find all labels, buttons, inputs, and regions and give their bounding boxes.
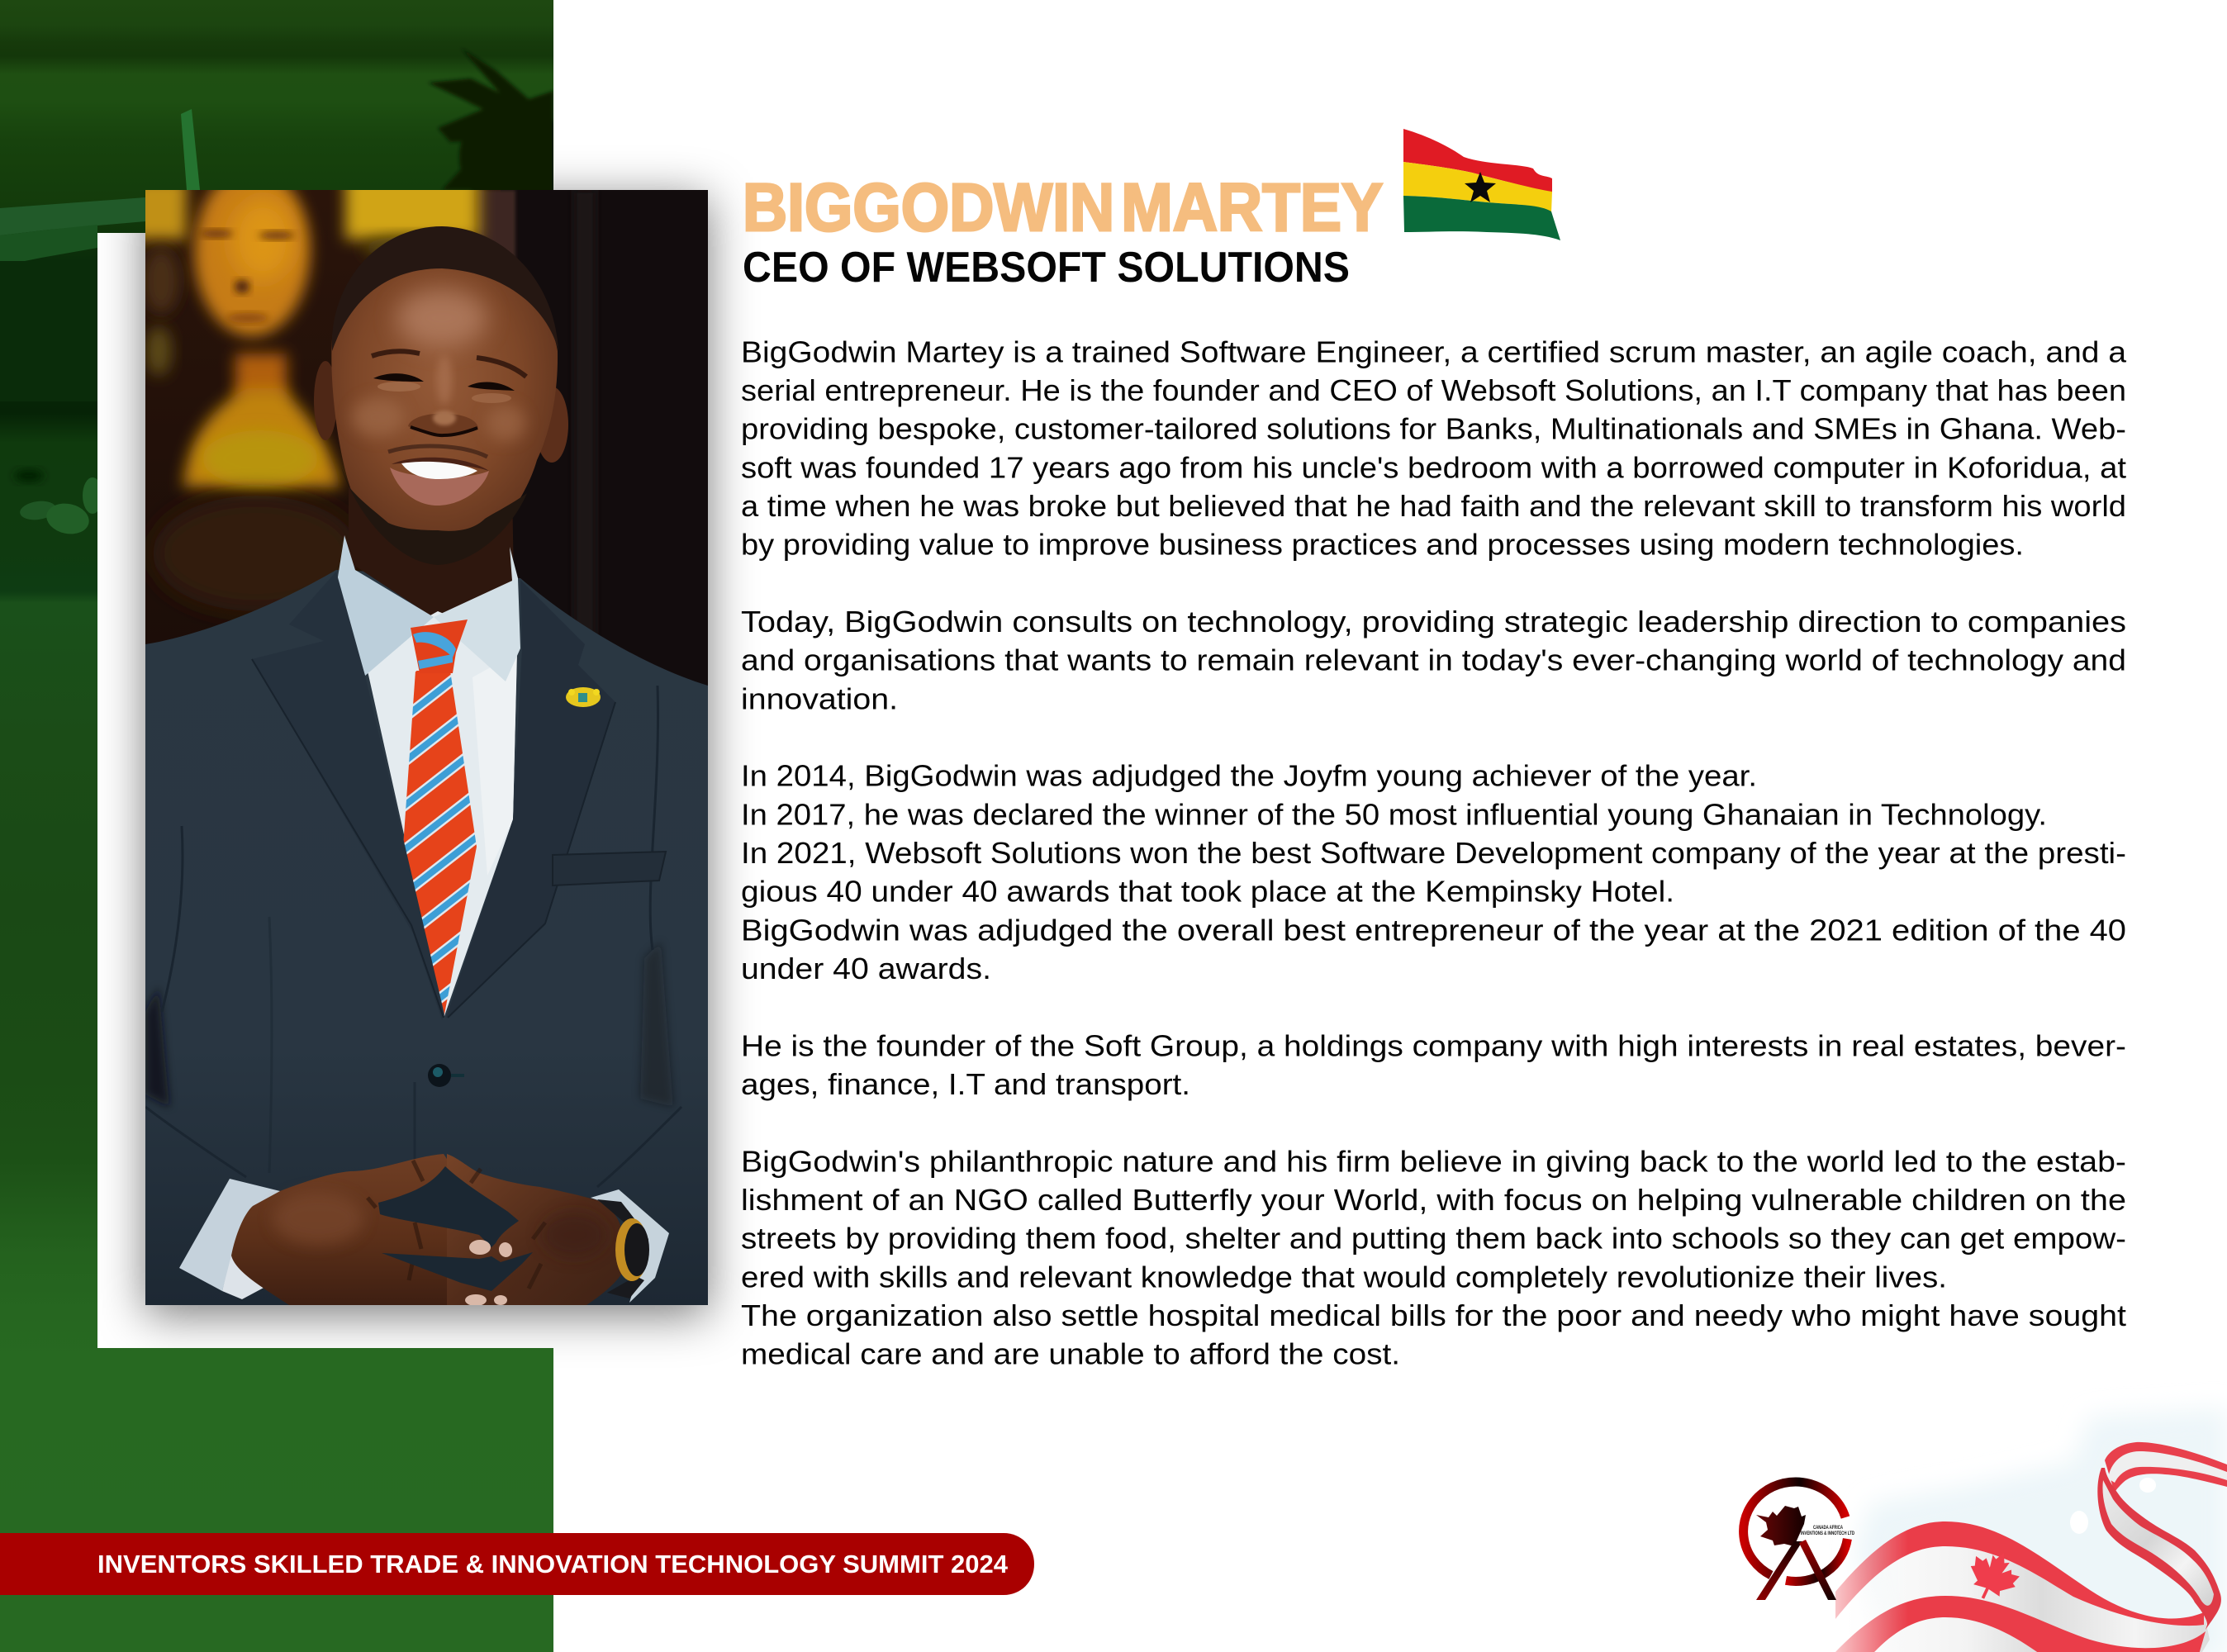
ribbon S fold	[2097, 1468, 2221, 1630]
biography paragraph 5: medical care and are unable to afford the cost.	[741, 1337, 1400, 1371]
gaps between fingers	[378, 1166, 533, 1291]
suit jacket	[145, 570, 708, 1305]
biography paragraph 4: ages, finance, I.T and transport.	[741, 1067, 1190, 1101]
biography paragraph 3: awards: In 2014, BigGodwin was adjudged the Joyfm young achiever of the year.	[741, 759, 1757, 793]
biography paragraph 4	[741, 1028, 2126, 1101]
photo shadow	[145, 198, 708, 1315]
portrait photo	[132, 168, 708, 1306]
forehead highlight	[396, 289, 487, 347]
biography paragraph 3: awards: BigGodwin was adjudged the overall best entrepreneur of the year at the 2021 edition of the 40	[741, 913, 2126, 947]
biography paragraph 5: The organization also settle hospital medical bills for the poor and needy who might have sought	[741, 1298, 2126, 1332]
eyes	[373, 373, 424, 382]
biography paragraph 5	[741, 1144, 2126, 1371]
table edge in green room	[0, 197, 145, 401]
eyebrows	[372, 351, 420, 356]
banner: summit name: INVENTORS SKILLED TRADE & INNOVATION TECHNOLOGY SUMMIT 2024	[97, 1550, 1009, 1578]
logo maple leaf	[1756, 1506, 1806, 1546]
jacket button	[428, 1064, 464, 1087]
logo text: INVENTIONS & INNOTECH LTD	[1801, 1531, 1854, 1536]
biography paragraph 2: innovation.	[741, 681, 898, 715]
necktie	[403, 620, 477, 1014]
corner decoration: Canadian ribbon	[1835, 1408, 2227, 1652]
shaded gaps beside torso	[145, 942, 673, 1107]
biography paragraph 3: awards: In 2017, he was declared the winner of the 50 most influential young Ghanaian in Technology.	[741, 797, 2047, 831]
job title: CEO OF WEBSOFT SOLUTIONS	[743, 244, 1350, 292]
logo: Canada Africa Inventions & Innotech	[1744, 1482, 1854, 1600]
lapels	[252, 572, 615, 1020]
moustache	[388, 446, 487, 457]
flag of Ghana	[1403, 129, 1560, 240]
biography paragraph 1: serial entrepreneur. He is the founder and CEO of Websoft Solutions, an I.T company that has been	[741, 373, 2126, 407]
green stick	[181, 109, 200, 190]
biography paragraph 2	[741, 605, 2126, 715]
shirt front	[363, 611, 517, 1016]
biography paragraph 1: BigGodwin Martey is a trained Software Engineer, a certified scrum master, an agile coach, and a	[741, 335, 2127, 368]
right cuff	[591, 1189, 669, 1303]
biography paragraph 3: awards	[741, 759, 2126, 985]
shirt collar	[337, 535, 520, 681]
left hand	[231, 1154, 447, 1305]
panel: green background with room photo	[0, 0, 568, 1652]
lower lip	[390, 468, 489, 506]
ribbon body	[1835, 1521, 2210, 1652]
biography paragraph 3: awards: gious 40 under 40 awards that took place at the Kempinsky Hotel.	[741, 875, 1674, 909]
biography paragraph 5: streets by providing them food, shelter and putting them back into schools so they can get empow-	[741, 1222, 2126, 1256]
banner: summit name	[0, 1533, 1034, 1595]
lapel pin: Ghana coat of arms	[566, 687, 601, 707]
cheek highlights	[352, 397, 405, 437]
biography paragraph 1: a time when he was broke but believed that he had faith and the relevant skill to transform his world	[741, 489, 2126, 523]
logo letter A	[1756, 1541, 1802, 1600]
neck	[349, 487, 514, 618]
plant silhouette	[428, 49, 553, 190]
left cuff	[179, 1179, 280, 1299]
name heading: BIGGODWIN MARTEY	[743, 170, 1383, 245]
biography paragraph 1: providing bespoke, customer-tailored solutions for Banks, Multinationals and SMEs in Ghana. Web-	[741, 412, 2126, 446]
wristwatch	[597, 1199, 649, 1298]
logo text: CANADA AFRICA	[1813, 1525, 1843, 1531]
biography paragraph 5: ered with skills and relevant knowledge that would completely revolutionize their lives.	[741, 1260, 1947, 1294]
nose	[437, 355, 452, 405]
biography paragraph 1	[741, 335, 2127, 562]
upper lip	[392, 458, 489, 471]
breast pocket	[553, 852, 666, 885]
face	[331, 263, 558, 563]
ribbon top band	[2105, 1442, 2227, 1493]
head and face	[314, 226, 568, 565]
maple leaf on ribbon	[1960, 1542, 2026, 1609]
logo text	[1801, 1525, 1854, 1536]
blurred hands in green room	[14, 469, 102, 538]
ears	[314, 361, 337, 440]
sleeve creases	[145, 686, 681, 1187]
biography paragraph 3: awards: under 40 awards.	[741, 952, 991, 985]
beard	[341, 467, 527, 565]
teeth	[401, 462, 477, 479]
blurred Mona Lisa background	[145, 190, 708, 686]
biography paragraph 1: soft was founded 17 years ago from his uncle's bedroom with a borrowed computer in Koforidua, at	[741, 450, 2126, 484]
biography paragraph 1: by providing value to improve business practices and processes using modern technologies.	[741, 528, 2024, 562]
biography paragraph 5: lishment of an NGO called Butterfly your World, with focus on helping vulnerable children on the	[741, 1183, 2126, 1217]
biography paragraph 2: Today, BigGodwin consults on technology, providing strategic leadership direction to companies	[741, 605, 2126, 638]
right hand	[447, 1154, 623, 1305]
hair	[332, 226, 558, 351]
finger nails	[465, 1240, 514, 1306]
logo ring	[1744, 1482, 1845, 1575]
biography paragraph 2: and organisations that wants to remain relevant in today's ever-changing world of technology and	[741, 643, 2126, 677]
biography paragraph 5: BigGodwin's philanthropic nature and his firm believe in giving back to the world led to the estab-	[741, 1144, 2126, 1178]
panel: white photo mat	[97, 233, 560, 1348]
biography paragraph 4: He is the founder of the Soft Group, a holdings company with high interests in real estates, bever-	[741, 1028, 2126, 1062]
biography paragraph 3: awards: In 2021, Websoft Solutions won the best Software Development company of the year at the presti-	[741, 836, 2126, 870]
